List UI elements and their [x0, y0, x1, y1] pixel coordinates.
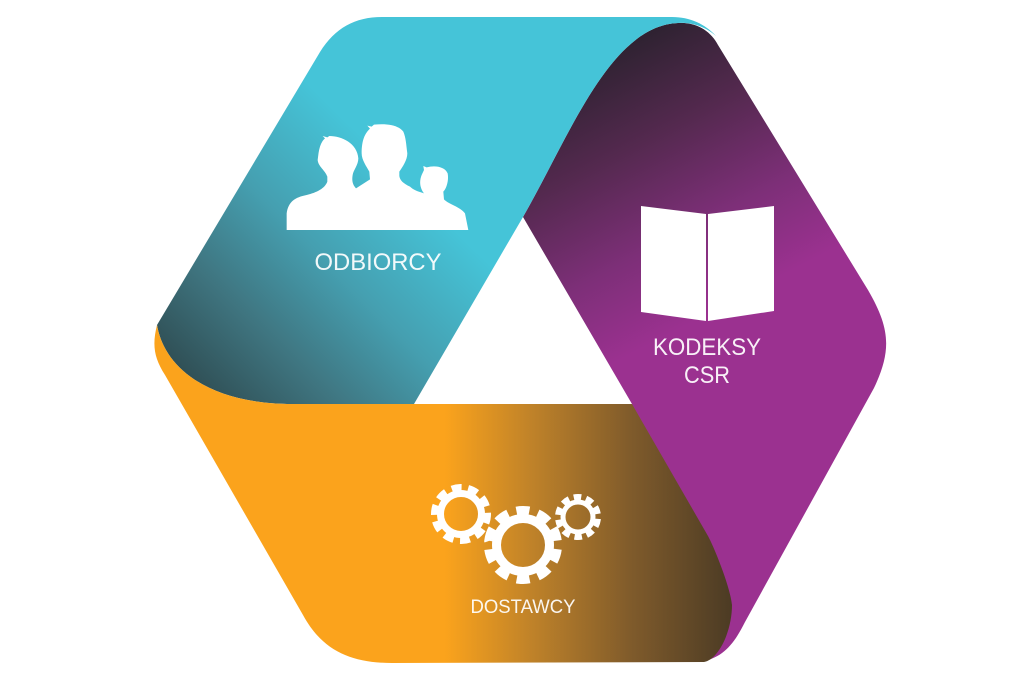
panel: ODBIORCY blue ribbon — [157, 17, 716, 404]
text: KODEKSY CSR label: CSR — [684, 362, 730, 389]
text: KODEKSY CSR label — [653, 334, 761, 389]
icon: gears — [435, 488, 600, 583]
panel: DOSTAWCY orange ribbon — [154, 325, 732, 663]
panel: KODEKSY CSR purple ribbon — [523, 23, 886, 662]
text: KODEKSY CSR label: KODEKSY — [653, 334, 761, 361]
icon: open book — [641, 206, 774, 321]
text: ODBIORCY label: ODBIORCY — [314, 249, 442, 276]
text: DOSTAWCY label: DOSTAWCY — [470, 597, 576, 618]
icon: people — [287, 124, 468, 230]
